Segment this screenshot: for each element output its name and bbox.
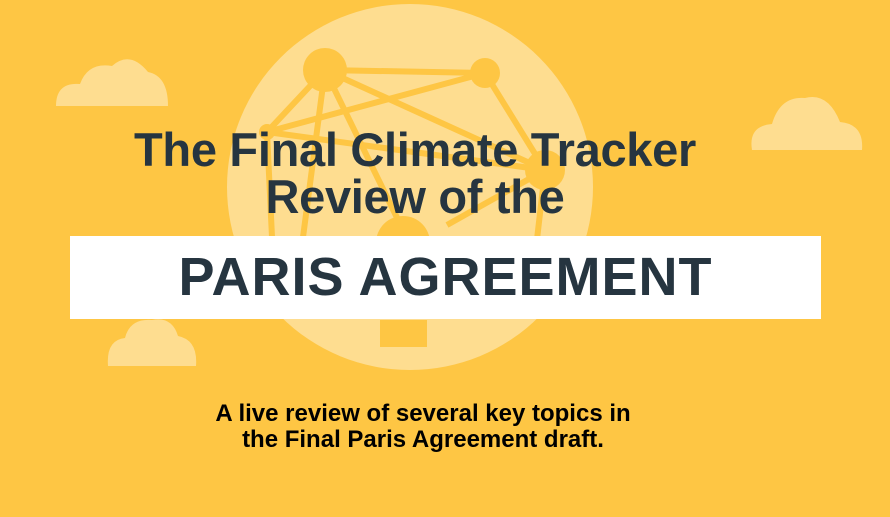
title: Review of the (265, 170, 565, 223)
title: The Final Climate Tracker (134, 123, 696, 176)
banner: Paris Agreement: PARIS AGREEMENT (178, 247, 713, 307)
title (134, 123, 696, 223)
subtitle: the Final Paris Agreement draft. (242, 426, 604, 453)
subtitle (215, 400, 631, 453)
banner: Paris Agreement (70, 236, 821, 319)
clouds (56, 59, 862, 366)
subtitle: A live review of several key topics in (215, 400, 631, 427)
